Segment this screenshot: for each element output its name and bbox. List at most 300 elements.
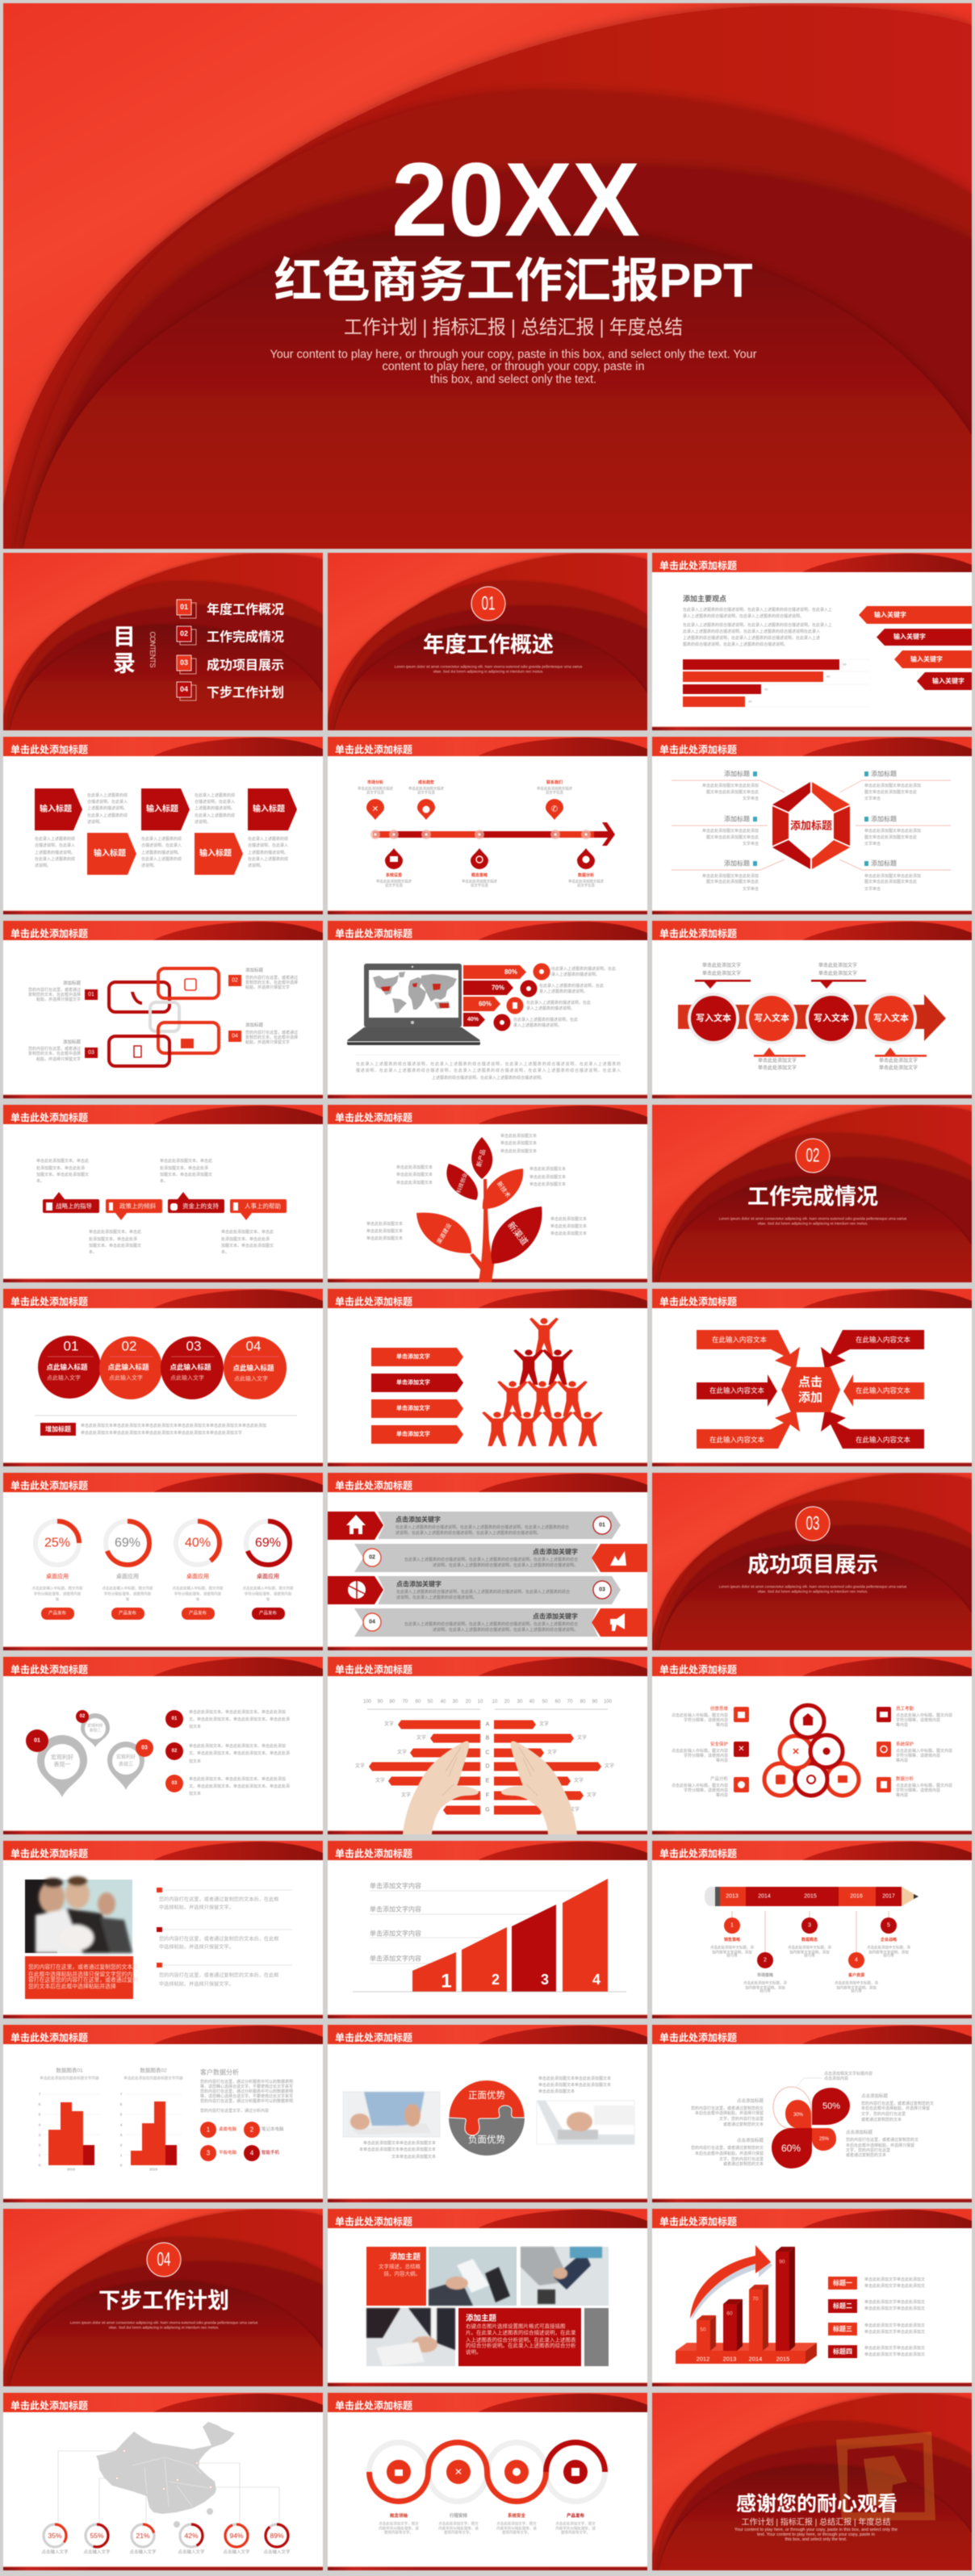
slide frame (652, 2209, 972, 2386)
donut labels: 点击输入文字 (41, 2549, 69, 2555)
lower descriptions: 述说明。 (35, 863, 51, 868)
chart 1: 2 (39, 2143, 41, 2147)
top note: 点击添加相关文字标题内容 (824, 2071, 872, 2076)
chart 1: 6 (39, 2102, 41, 2106)
section number badge: 03 (806, 1512, 820, 1535)
text arrows (371, 1348, 463, 1444)
thank you title: 感谢您的耐心观看 (736, 2492, 898, 2515)
upper labels: 单击此处添加图文描述 (408, 786, 445, 791)
right descriptions: 员工考勤 (896, 1705, 914, 1712)
orange text box: 容打在这里您的内容打在这里，或者通过复制 (28, 1976, 138, 1984)
category letters: E (486, 1779, 490, 1784)
gray pins: 宏观利好 (116, 1754, 136, 1760)
percentage descriptions: 在此录入上述图表的描述说明，在此 (551, 966, 616, 972)
upper pins: ✆ (551, 805, 558, 813)
ribbon 03: 03 (599, 1587, 605, 1593)
pin badges: 02 (80, 1714, 86, 1719)
donut labels: 桌面应用 (186, 1572, 209, 1580)
numbered tags: 03 (88, 1050, 94, 1056)
upper labels: 联系我们 (546, 780, 563, 785)
right descriptions: 点击此处输入中标题，图文内容 (896, 1712, 952, 1718)
bottom descriptions: 本。 (221, 1249, 229, 1255)
device legend: 桌面电脑 (219, 2126, 237, 2132)
plant leaves (416, 1137, 542, 1264)
bar labels: 文字 (605, 1763, 614, 1769)
puzzle circle: 负面优势 (468, 2134, 505, 2145)
text arrows: 单击添加文字 (396, 1404, 430, 1411)
donut buttons: 产品发布 (48, 1609, 66, 1616)
timeline nodes: 3 (808, 1922, 811, 1929)
tag description (81, 1423, 266, 1436)
orange theme box: 括，内容大纲。 (384, 2269, 421, 2277)
lower callouts: 单击此处添加文字 (879, 1064, 918, 1071)
note 3: 中选择粘贴，并选择只保留文字。 (159, 1980, 234, 1987)
left labels: 添加标题 (724, 815, 750, 823)
chart 1 (39, 2066, 100, 2171)
lower descriptions: 合描述说明，在此录入 (141, 843, 182, 848)
lower descriptions: 在此录入上述图表的综 (35, 836, 75, 842)
bar chart: 40 (748, 699, 752, 704)
summary paragraph: 描述说明，在此录入上述图表的综合描述说明，在此录入上述图表的综合描述说明，在此录入上述图表的综合描述说明，在此录入 (356, 1068, 621, 1073)
3D bars: 50 (700, 2327, 706, 2332)
upper labels: 市场分析 (367, 780, 383, 785)
wave labels: 内容字符分隔处理等，请 (496, 2526, 537, 2531)
plant leaves: 新技术 (496, 1180, 513, 1199)
customer analysis text: 您的内容打在这里，通过分析图表中可以的数据表明 (200, 2089, 293, 2094)
left labels (702, 770, 759, 892)
note 2 (157, 1927, 292, 1950)
slide: map pins (3, 1657, 323, 1834)
slide frame (328, 921, 647, 1098)
photo: typing on laptop (521, 2247, 609, 2306)
world map (373, 972, 457, 1013)
percentage icons (494, 964, 550, 1031)
wave labels: 使用内容等文字。 (384, 2529, 413, 2536)
upper callouts: 单击此处添加文字 (818, 970, 857, 976)
right labels: 文字单击 (864, 886, 881, 892)
year labels: 2015 (776, 2355, 789, 2363)
donut descriptions: 等 (266, 1596, 270, 1601)
laptop illustration (347, 964, 480, 1045)
frame icons (131, 979, 196, 1057)
contents heading: 目 (113, 625, 136, 649)
slide heading: 单击此处添加标题 (10, 1111, 88, 1123)
timeline nodes: 2 (764, 1958, 767, 1963)
contents list: 03 (180, 659, 188, 667)
ribbon 01: 点击添加关键字 (395, 1516, 441, 1524)
timeline nodes (724, 1917, 897, 1968)
top descriptions: 单击此处添加图文本。单击此 (36, 1158, 89, 1164)
key point text: 此录入上述图表的综合描述说明，在此录入上述图表的综合描述说明在此录入 (683, 629, 820, 634)
bottom descriptions: 处添加图文本。单击此处添 (221, 1236, 270, 1242)
slide: thank you (652, 2393, 972, 2570)
donut values: 35% (48, 2532, 62, 2540)
slide: six arrows around hexagon (652, 1289, 972, 1466)
donut indicators (44, 2524, 288, 2547)
category letters: G (485, 1808, 490, 1813)
left descriptions: 字符分隔等，请使用内容 (684, 1788, 728, 1793)
timeline labels: 技巧等 (883, 1953, 894, 1958)
lower descriptions: 在此录入上述图表的综 (141, 856, 182, 862)
donut labels: 点击输入文字 (83, 2549, 111, 2555)
stair labels: 单击添加文字内容 (370, 1882, 421, 1890)
donut labels: 点击输入文字 (263, 2549, 291, 2555)
slide frame (3, 737, 323, 914)
ribbon 01: 述说明，在此录入上述图表的综合描述说明，在此录入上述图表的综合描述说明。 (395, 1530, 541, 1536)
orange text box: 您的内容打在这里，或者通过复制您的文本后 (28, 1963, 138, 1971)
upper labels (358, 780, 573, 796)
lower labels: 概念策略 (471, 872, 488, 878)
bottom descriptions: 处添加图文本。单击此处添 (89, 1236, 137, 1242)
timeline labels: 点击此处添加中文标题，添 (710, 1945, 754, 1950)
lower descriptions: 述说明。 (141, 863, 157, 868)
hero description (270, 347, 757, 386)
numbered circles: 点此输入文字 (170, 1374, 204, 1382)
ribbon 04: 点击添加关键字 (533, 1612, 578, 1620)
left petal text: 本后在此框中选择粘贴，并选择只保留 (695, 2151, 764, 2156)
wave labels (379, 2512, 596, 2536)
pencil timeline: 2014 (758, 1893, 771, 1900)
map connectors (58, 2451, 279, 2524)
slide frame (328, 1289, 647, 1466)
left descriptions: 字符分隔等，请使用内容 (684, 1717, 728, 1723)
timeline labels: 加内容等文字说明，添加 (868, 1950, 909, 1955)
ribbon 02: 在此录入上述图表的综合描述说明，在此录入上述图表的综合描述说明，在此录入上述图表的综合 (404, 1557, 578, 1562)
section background (652, 1105, 972, 1282)
pin badges: 01 (34, 1738, 40, 1743)
pointing arrows: 在此输入内容文本 (712, 1336, 767, 1344)
slide heading: 单击此处添加标题 (659, 1663, 737, 1675)
right labels: 图文单击此处添加图文单击此 (864, 879, 917, 884)
upper descriptions: 合描述说明，在此录入 (195, 799, 235, 805)
numbered circles: 点此输入文字 (47, 1374, 81, 1382)
category letters: D (485, 1764, 490, 1769)
numbered circles: 点此输入标题 (46, 1363, 88, 1371)
ribbon 04: 述说明，在此录入上述图表的综合描述说明，在此录入上述图表的综合描述说明。 (433, 1627, 578, 1633)
central hexagon: 添加 (798, 1391, 822, 1404)
left bars (369, 1721, 480, 1814)
donut values: 40% (185, 1537, 211, 1549)
numbered descriptions: 03 (172, 1781, 178, 1786)
customer analysis text: 等，请您精心选择合适文字，不要使用过长文字来写 (200, 2084, 293, 2089)
ribbon 04 (354, 1608, 647, 1637)
ring icons: ✕ (792, 1747, 800, 1757)
upper descriptions: 上述图表的描述说明。 (195, 805, 235, 811)
summary paragraph: 上述图表的综合描述说明，在此录入上述图表的综合描述说明。 (432, 1075, 545, 1081)
lower labels: 单击此处添加图文描述 (376, 878, 412, 884)
text circles (688, 993, 917, 1044)
donut labels (46, 1572, 279, 1580)
slide frame (328, 1657, 647, 1834)
note 3 (157, 1963, 292, 1987)
bottom descriptions: 加图文本。单击此处添加图文 (89, 1243, 141, 1248)
timeline labels: 点击此处添加中文标题，添 (867, 1945, 910, 1950)
pencil timeline: 2017 (882, 1893, 895, 1900)
left labels: 单击此处添加图文单击此处添加 (702, 783, 759, 788)
left description (359, 2140, 436, 2160)
lower callouts: 单击此处添加文字 (758, 1057, 797, 1064)
petal chart (772, 2087, 850, 2168)
device legend: 4 (250, 2150, 254, 2156)
frame descriptions: 您的内容打在这里，或者通过 (28, 1046, 81, 1052)
slide frame (3, 1657, 323, 1834)
frame descriptions: 复制您的文本，在此框中选择 (245, 980, 298, 985)
thank you background (652, 2393, 972, 2570)
left description: 本单击此处添加图文本单击此处添加图文本 (359, 2147, 436, 2152)
callout labels: 战略上的指导 (56, 1202, 92, 1210)
left hand (403, 1741, 479, 1834)
timeline labels: 市场策略 (757, 1972, 773, 1978)
frame descriptions: 您的内容打在这里，或者通过 (245, 975, 298, 981)
donut values: 21% (136, 2532, 150, 2540)
pencil timeline: 2016 (850, 1893, 863, 1900)
donut descriptions: 点击此处输入中标题，图文内容 (102, 1585, 153, 1591)
percentage descriptions: 录入上述图表的描述说明。 (513, 1022, 562, 1028)
central hexagon (781, 1367, 840, 1412)
donut descriptions: 字符分隔处理等，请使用内容 (245, 1591, 292, 1596)
ribbon 01: 01 (599, 1522, 605, 1528)
left descriptions: 产品分析 (710, 1775, 728, 1782)
right labels: 文字单击 (864, 796, 881, 801)
note 1 (157, 1888, 292, 1911)
slide frame (3, 1473, 323, 1650)
map of China (96, 2422, 235, 2528)
left labels: 文字单击 (743, 886, 759, 892)
chart 1: 2016 (67, 2168, 76, 2171)
lower callouts: 单击此处添加文字 (879, 1057, 918, 1064)
pencil timeline: 2015 (804, 1893, 817, 1900)
right labels: 添加标题 (871, 770, 897, 778)
tag descriptions: 单击此处添加文字单击此处添加文 (864, 2283, 925, 2289)
top descriptions: 处添加图文本。单击此处添 (36, 1165, 85, 1171)
frame descriptions: 您的内容打在这里，或者通过 (28, 987, 81, 993)
slide: section 01 (328, 553, 647, 730)
petal chart: 60% (781, 2143, 801, 2154)
left petal text: 文字，您的内容打在这里 (719, 2116, 764, 2122)
left description: 单击此处添加图文本单击此处添加图文本 (363, 2140, 436, 2146)
label lines (370, 1891, 600, 1963)
arrow blocks: 输入标题 (199, 847, 232, 859)
title tags (828, 2277, 857, 2358)
frame descriptions: 您的内容打在这里，或者通过 (245, 1030, 298, 1035)
donut labels: 点击输入文字 (178, 2549, 205, 2555)
gray accent box (584, 2308, 609, 2366)
slide: section 04 (3, 2209, 323, 2386)
frame descriptions: 复制您的文本，在此框中选择 (245, 1035, 298, 1040)
left labels: 单击此处添加图文单击此处添加 (702, 873, 759, 879)
stair numbers (441, 1971, 600, 1992)
gray pins: 表现二 (90, 1727, 101, 1733)
right petal text: 点击添加标题 (846, 2129, 873, 2135)
faint stamp watermark (836, 2432, 935, 2520)
right labels: 单击此处添加图文单击此处添加 (864, 873, 921, 879)
lower descriptions: 合描述说明，在此录入 (35, 843, 75, 848)
dark theme box: 的综合分析说明。在此录入上述图表的综合分析 (466, 2342, 576, 2348)
axis scale: 70 (567, 1700, 573, 1704)
upper callouts: 单击此处添加文字 (818, 962, 857, 968)
right descriptions: 系统保护 (896, 1741, 914, 1747)
frame descriptions: 添加标题 (245, 967, 264, 973)
upper callouts: 单击此处添加文字 (702, 970, 741, 976)
slide: China map (3, 2393, 323, 2570)
device legend: 平板电脑 (219, 2149, 237, 2156)
timeline labels: 加内容等文字说明，添加 (745, 1985, 785, 1990)
text circles: 写入文本 (696, 1012, 731, 1023)
device legend: 2 (250, 2126, 254, 2134)
ribbon 02 (354, 1544, 647, 1572)
left description: 文本单击此处添加图文本 (391, 2154, 436, 2160)
section description: vitae. Sed dui lorem adipiscing in adipiscing et interdum nec metus. (109, 2326, 219, 2329)
right labels: 图文单击此处添加图文单击此 (864, 789, 917, 795)
orange text box: 在此框中选择粘贴并选择只保留文字您的内 (28, 1971, 132, 1977)
left descriptions: 点击此处输入中标题，图文内容 (672, 1748, 728, 1754)
slide heading: 单击此处添加标题 (659, 559, 737, 571)
lower labels: 说文字信息 (385, 883, 404, 888)
lower callouts (754, 1048, 927, 1071)
wave labels: 产品发布 (567, 2512, 584, 2519)
donut values: 42% (184, 2532, 199, 2540)
device legend: 3 (207, 2150, 211, 2156)
chart 2: 0 (120, 2163, 123, 2168)
numbered circles: 点此输入标题 (107, 1363, 149, 1371)
contents heading: 录 (113, 650, 136, 676)
contents list: 成功项目展示 (207, 657, 284, 673)
slide: four support callouts (3, 1105, 323, 1282)
slide heading: 单击此处添加标题 (10, 2399, 88, 2411)
hero curved background (3, 3, 972, 549)
year labels (697, 2355, 789, 2363)
donut descriptions: 等 (56, 1596, 60, 1601)
upper descriptions (87, 792, 235, 825)
lower descriptions: 上述图表的描述说明。 (141, 850, 182, 855)
category letters: F (486, 1793, 489, 1798)
text arrows: 单击添加文字 (396, 1378, 430, 1386)
dark theme box: 入上述图表的综合分析说明。在此录入上述图表 (466, 2336, 576, 2344)
upper descriptions: 合描述说明，在此录入 (87, 799, 128, 805)
tag description: 单击此处添加文本单击此处添加文本单击此处添加文本单击此处添加文本单击此处添加文本单击此处添加 (81, 1423, 266, 1428)
section title: 下步工作计划 (98, 2289, 229, 2313)
gray pins (37, 1713, 144, 1797)
wave labels: 点击此处添加文字，图文 (496, 2521, 537, 2526)
left labels: 图文单击此处添加图文单击此 (706, 789, 759, 795)
numbered circles: 01 (64, 1338, 78, 1354)
gray pins: 宏观利好 (51, 1753, 73, 1761)
right descriptions: 点击此处输入中标题，图文内容 (896, 1748, 952, 1754)
connector lines (672, 780, 951, 870)
numbered circles: 04 (246, 1338, 261, 1354)
ribbon 04: 在此录入上述图表的综合描述说明，在此录入上述图表的综合描述说明，在此录入上述图表的综合 (404, 1621, 578, 1627)
numbered circles: 点此输入标题 (232, 1364, 274, 1372)
axis scale: 20 (466, 1700, 471, 1704)
chart 1: 5 (39, 2113, 41, 2117)
section number badge (796, 1507, 830, 1541)
slide heading: 单击此处添加标题 (10, 743, 88, 755)
gray pins: 宏观利好 (87, 1722, 103, 1729)
map markers (116, 2450, 211, 2490)
callout labels: 政策上的倾斜 (119, 1202, 156, 1210)
slide: rising stair chart (328, 1841, 647, 2018)
timeline nodes: 5 (887, 1922, 890, 1929)
slide heading: 单击此处添加标题 (335, 743, 412, 755)
category letters (485, 1722, 490, 1813)
axis scale: 80 (390, 1700, 395, 1704)
key point text: 录入上述图表的综合描述说明，在此录入上述图表的综合描述说明。 (683, 613, 804, 619)
callout labels (43, 1192, 287, 1220)
section background (328, 553, 647, 730)
axis scale: 30 (517, 1700, 523, 1704)
left descriptions: 点击此处输入中标题，图文内容 (672, 1783, 728, 1788)
slide: four numbered circles (3, 1289, 323, 1466)
ribbon 03 (328, 1576, 621, 1604)
numbered descriptions: 加文本 (189, 1724, 201, 1729)
petal chart: 50% (822, 2101, 840, 2111)
wave labels: 内容字符分隔处理等，请 (555, 2526, 596, 2531)
numbered tags: 04 (232, 1033, 238, 1039)
slide: positive and negative puzzle (328, 2025, 647, 2202)
slide heading: 单击此处添加标题 (10, 1295, 88, 1307)
right description: 单击此处添加图文本 (538, 2089, 575, 2094)
slide: alternating ribbons (328, 1473, 647, 1650)
donut buttons (41, 1608, 285, 1620)
bar labels: 文字 (375, 1777, 385, 1784)
ribbon 01 (328, 1512, 621, 1540)
slide: plant with leaves (328, 1105, 647, 1282)
leaf descriptions: 单击此处添加图文本 (366, 1228, 403, 1234)
left petal text: 文字，您的内容打在这里 (719, 2156, 764, 2162)
top descriptions: 加图文本。单击此处添加图文 (36, 1172, 89, 1177)
right description: 单击此处添加图文本单击此处添加图文本 (538, 2076, 611, 2081)
top note (796, 2071, 872, 2087)
left petal text: 或者通过复制您的文本 (723, 2122, 764, 2127)
left labels: 单击此处添加图文单击此处添加 (702, 828, 759, 834)
slide: team photo with notes (3, 1841, 323, 2018)
slide: four circles on arrow (652, 921, 972, 1098)
text arrows: 单击添加文字 (396, 1430, 430, 1437)
lower labels: 系统设置 (386, 872, 402, 878)
slide frame (328, 2025, 647, 2202)
ring cluster (764, 1705, 859, 1796)
chart 1: 1 (39, 2153, 41, 2157)
right petal text: 点击添加标题 (861, 2093, 889, 2099)
timeline nodes: 4 (855, 1958, 858, 1963)
timeline labels: 技巧等 (726, 1953, 738, 1958)
axis scale (363, 1700, 613, 1709)
customer analysis text: 您的内容打在这里文字，通过分析内容 (200, 2108, 269, 2114)
customer analysis text: 客户数据分析 (200, 2068, 239, 2076)
percentage descriptions (513, 966, 616, 1028)
pointing arrows (697, 1330, 924, 1449)
donut buttons: 产品发布 (189, 1609, 207, 1616)
chart 2: 5 (120, 2113, 123, 2117)
donut labels: 桌面应用 (116, 1572, 139, 1580)
axis scale: 50 (428, 1700, 433, 1704)
slide heading: 单击此处添加标题 (335, 1663, 412, 1675)
stair bars (412, 1879, 608, 1992)
left descriptions: 点击此处输入中标题，图文内容 (672, 1712, 728, 1718)
right petal text (846, 2093, 934, 2158)
key point text: 上述图表的综合描述说明，在此录入上述图表的综合描述说明，在此录入上述 (683, 635, 820, 641)
growth arrow (690, 2245, 772, 2320)
slide heading: 单击此处添加标题 (659, 743, 737, 755)
numbered circles: 点此输入文字 (109, 1374, 143, 1382)
3D bars: 60 (726, 2311, 733, 2316)
lower descriptions: 合描述说明，在此录入 (248, 843, 288, 848)
contents list: 年度工作概况 (207, 602, 284, 617)
stair labels: 单击添加文字内容 (370, 1905, 421, 1913)
slide heading: 单击此处添加标题 (10, 2031, 88, 2043)
donut values: 25% (44, 1537, 70, 1549)
chart 1: 7 (39, 2092, 41, 2097)
